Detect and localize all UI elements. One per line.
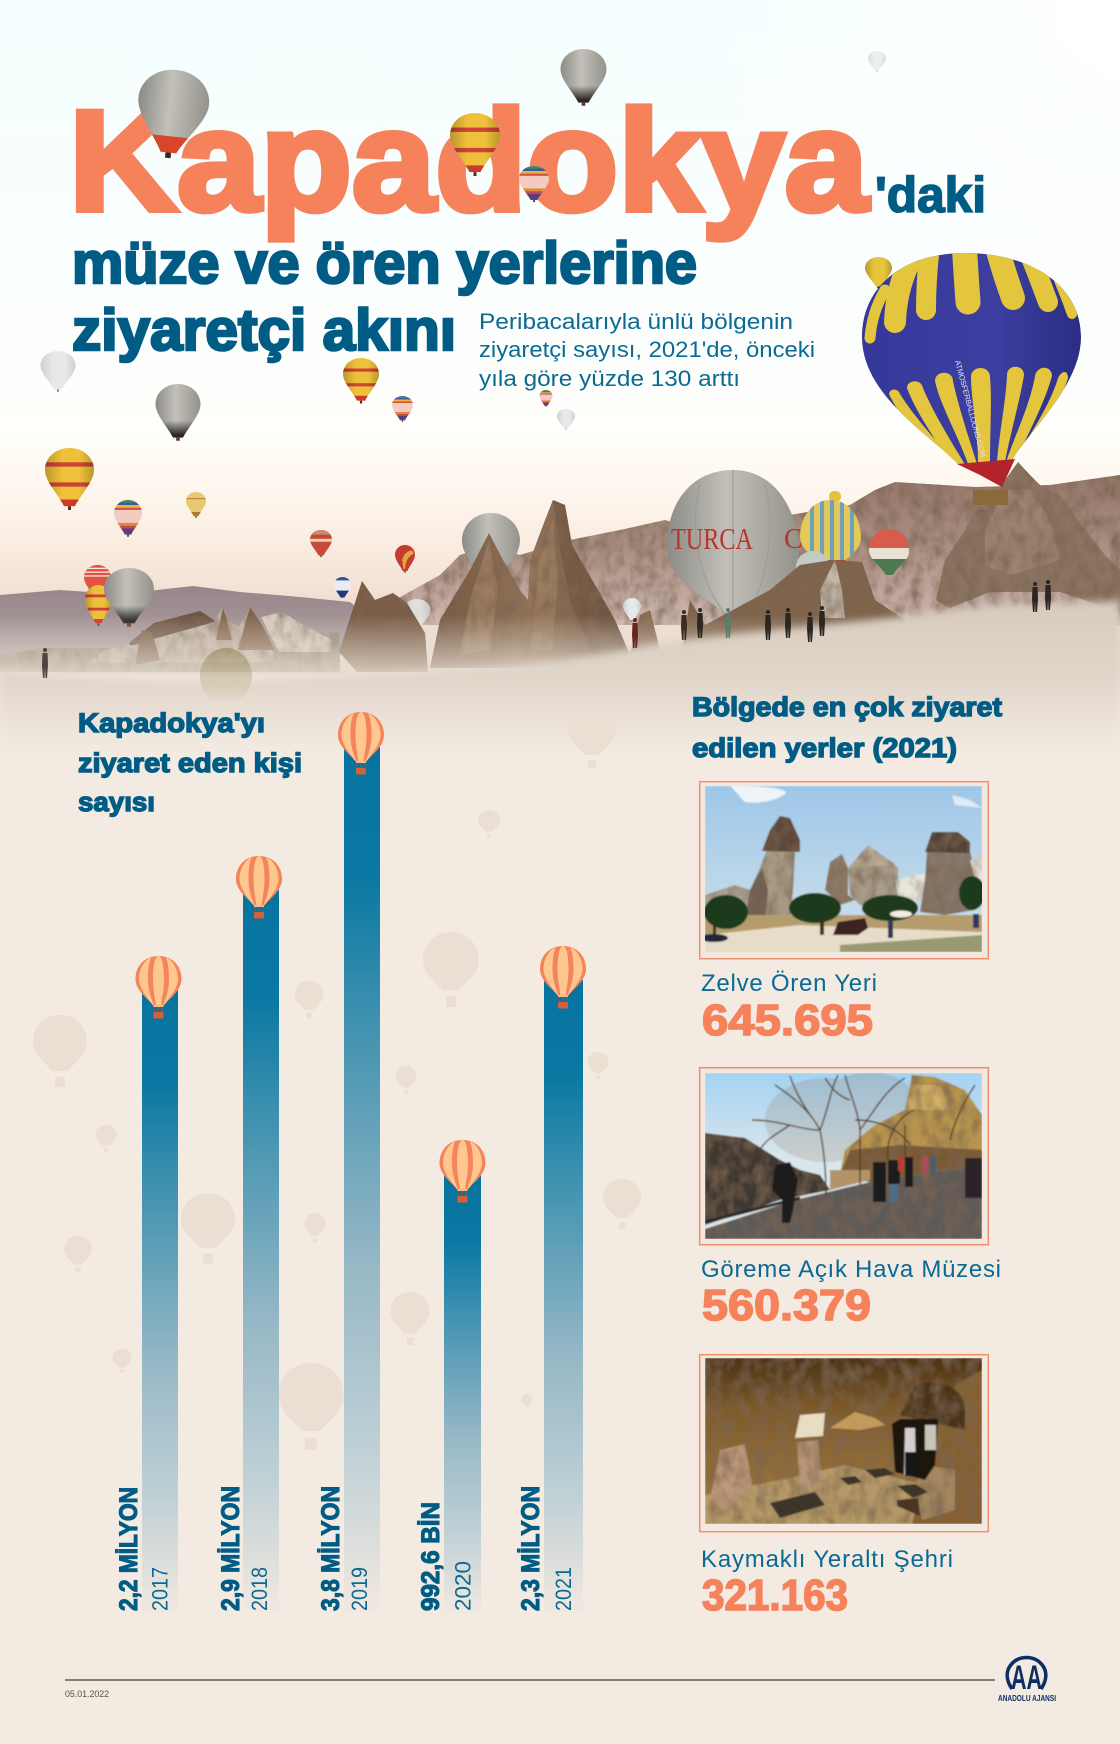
bar 2019 (317, 712, 384, 1613)
heading: most visited places (692, 692, 1002, 763)
balloon: TURCA (667, 470, 803, 627)
title: Kapadokya'daki müze ve ören yerlerine ziyaretçi akını: Kapadokya (69, 82, 870, 241)
subtitle text: Peribacalarıyla ünlü bölgenin (479, 309, 793, 334)
bar 2018: 2,9 MİLYON (217, 1486, 245, 1611)
photo frame: Zelve (700, 782, 988, 959)
fog over rock bases (0, 615, 1120, 675)
subtitle text: yıla göre yüzde 130 arttı (479, 366, 740, 391)
value: Zelve: 645.695 (702, 996, 873, 1045)
heading: visitors chart: ziyaret eden kişi (78, 748, 302, 778)
balloon: red white green (868, 528, 910, 576)
heading: visitors chart: sayısı (78, 787, 155, 817)
balloon: grey green (796, 551, 830, 583)
label: Kaymaklı: Kaymaklı Yeraltı Şehri (701, 1546, 953, 1573)
balloon: TURCA: TURCA (671, 521, 753, 556)
heading: visitors chart: Kapadokya'yı (78, 708, 265, 738)
title: Kapadokya'daki müze ve ören yerlerine ziyaretçi akını: ziyaretçi akını (72, 298, 456, 363)
photo: Zelve fairy chimneys (700, 786, 985, 952)
heading: visitors chart (78, 708, 302, 817)
subtitle text: ziyaretçi sayısı, 2021'de, önceki (479, 337, 815, 362)
bar 2020: 992,6 BİN (417, 1502, 445, 1611)
value: Göreme: 560.379 (702, 1281, 871, 1330)
balloon: yellow and blue stripes (800, 491, 861, 561)
panel: Göreme (700, 1068, 1001, 1330)
photo: Kaymaklı underground city (705, 1358, 982, 1524)
photo: Göreme open air museum (705, 1072, 982, 1239)
photo frame: Kaymaklı (700, 1355, 988, 1532)
sky balloons (40, 49, 892, 573)
panel: Kaymaklı (700, 1355, 988, 1620)
heading: most visited places: edilen yerler (2021) (692, 733, 957, 763)
distant mountain (0, 586, 380, 670)
bar 2019: 2019 (347, 1567, 372, 1611)
bar 2018: 2018 (247, 1567, 272, 1611)
heading: most visited places: Bölgede en çok ziyaret (692, 692, 1002, 722)
bar 2021: 2021 (551, 1567, 576, 1611)
subtitle text (479, 309, 815, 391)
bar 2020 (417, 1140, 486, 1613)
bar 2017 (115, 956, 182, 1613)
back cliffs (395, 475, 1120, 625)
pale background balloons (33, 706, 641, 1450)
label: Göreme: Göreme Açık Hava Müzesi (701, 1256, 1001, 1283)
left rock formations (0, 607, 340, 672)
balloons behind the rocks (84, 513, 641, 630)
bar chart: visitors per year (115, 712, 586, 1613)
large blue balloon with yellow stripes (860, 240, 1084, 505)
footer rule (65, 1679, 995, 1681)
date: 05.01.2022 (65, 1689, 109, 1699)
large blue balloon with yellow stripes: ATMOSFERBALLOONS.COM (953, 359, 988, 458)
title: Kapadokya'daki müze ve ören yerlerine ziyaretçi akını: müze ve ören yerlerine (72, 231, 697, 296)
right rock group (682, 462, 1120, 660)
photo frame: Göreme (700, 1068, 988, 1245)
visitors on the path (42, 580, 1051, 678)
bar 2017: 2,2 MİLYON (115, 1487, 143, 1611)
title: Kapadokya'daki müze ve ören yerlerine ziyaretçi akını (69, 82, 986, 363)
title: Kapadokya'daki müze ve ören yerlerine ziyaretçi akını: 'daki (875, 167, 986, 223)
value: Kaymaklı: 321.163 (702, 1571, 848, 1620)
balloon: TURCA: C (784, 524, 803, 555)
ground and fog (0, 600, 1120, 770)
bar 2021: 2,3 MİLYON (517, 1486, 545, 1611)
panel: Zelve (700, 782, 988, 1045)
bar 2021 (517, 946, 586, 1613)
logo: Anadolu Ajansı (998, 1658, 1056, 1703)
bar 2020: 2020 (450, 1561, 476, 1611)
bar 2019: 3,8 MİLYON (317, 1486, 345, 1611)
bar 2018 (217, 856, 282, 1613)
logo: Anadolu Ajansı: AA (1011, 1659, 1042, 1697)
sky gradient (0, 0, 1120, 760)
logo: Anadolu Ajansı: ANADOLU AJANSI (998, 1693, 1056, 1703)
label: Zelve: Zelve Ören Yeri (701, 970, 877, 997)
bar 2017: 2017 (148, 1567, 172, 1611)
central fairy chimneys (339, 500, 660, 672)
